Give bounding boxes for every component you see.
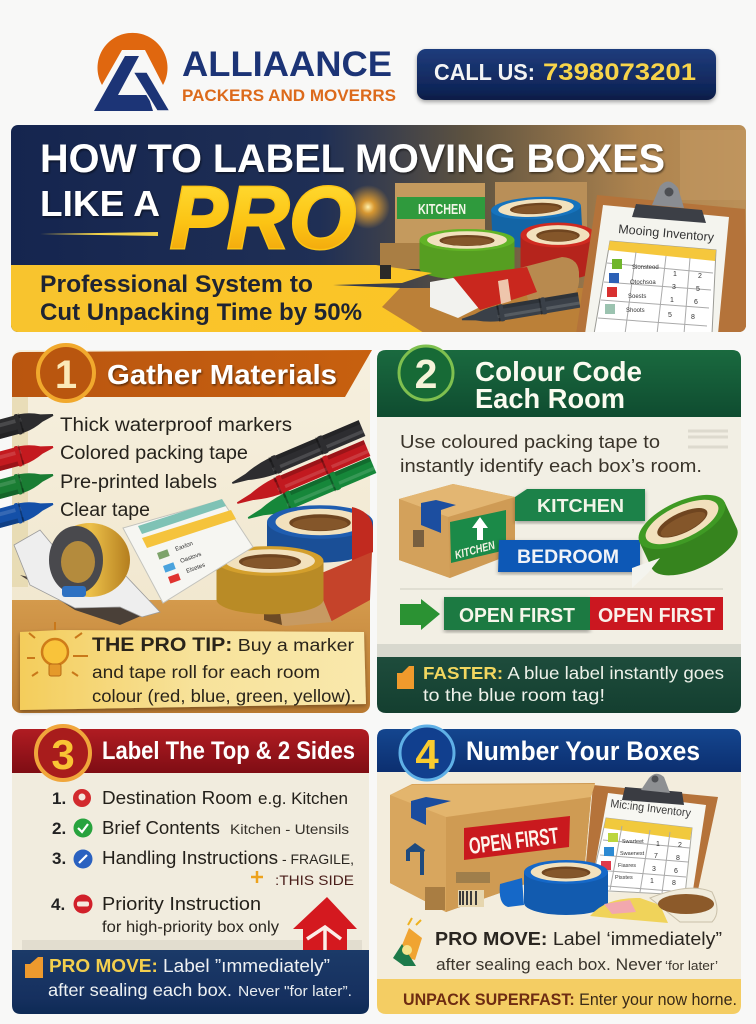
panel 2 background <box>377 350 741 713</box>
logo mark <box>94 33 170 111</box>
panel 4 heading: Number Your Boxes <box>466 736 700 766</box>
panel 1 header <box>12 350 372 397</box>
panel 2 body text: Use coloured packing tape to <box>400 432 660 452</box>
panel 2 heading: Each Room <box>475 383 625 414</box>
phone text: CALL US: <box>434 59 535 85</box>
inventory table: Sionsteod <box>632 265 659 271</box>
item 2 <box>52 818 349 838</box>
pro move text: PRO MOVE: Label ‘immediately” <box>435 929 722 949</box>
yellow ribbon <box>11 265 432 333</box>
icon: red house arrow <box>293 897 357 951</box>
hero banner <box>11 125 750 334</box>
pale band above footer <box>22 940 362 952</box>
icon: rocket bell <box>393 918 422 966</box>
inventory table: 1 <box>670 297 674 304</box>
item 1 <box>52 788 348 808</box>
open first row: OPEN FIRST <box>459 605 575 627</box>
bedroom tag: BEDROOM <box>517 547 619 568</box>
inventory table: 8 <box>672 880 676 887</box>
inventory table: Otochsoa <box>630 280 656 286</box>
company name: ALLIAANCE <box>182 45 392 84</box>
inventory table: 8 <box>691 314 695 321</box>
item 2: Kitchen - Utensils <box>230 821 349 837</box>
panel 1 background <box>12 350 370 713</box>
divider <box>400 588 723 590</box>
panel 2 body text <box>400 432 702 476</box>
inventory table: 6 <box>674 868 678 875</box>
panel 2: colour code <box>377 346 745 713</box>
green tape roll <box>420 229 514 280</box>
inventory table: Pisstes <box>615 875 633 881</box>
materials list: Clear tape <box>60 500 150 521</box>
panel 4: number your boxes: ‘for later’ <box>665 959 718 973</box>
label sheet: Elsetes <box>186 563 206 575</box>
pro tip card: colour (red, blue, green, yellow). <box>92 686 356 706</box>
red and cardboard wrap <box>262 552 372 626</box>
blue tape roll <box>490 195 583 250</box>
number badge 2: 2 <box>415 351 437 397</box>
inventory table: 2 <box>678 842 682 849</box>
unpack superfast bar <box>377 979 741 1014</box>
inventory table <box>594 241 716 334</box>
red open first tag <box>590 597 723 630</box>
label sheet <box>123 499 253 603</box>
inventory table: 1 <box>650 878 654 885</box>
inventory table: 1 <box>673 271 677 278</box>
item 4: for high-priority box only <box>102 919 279 936</box>
title line 2: LIKE A <box>40 183 160 224</box>
label sheet: Eaxlon <box>175 541 194 553</box>
sticky tape and pink label <box>590 888 717 923</box>
inventory table: 3 <box>672 284 676 291</box>
number badge 3: 3 <box>51 731 75 778</box>
item 1: e.g. Kitchen <box>258 790 348 808</box>
item 3 <box>52 848 354 888</box>
panel 1: gather materials <box>0 345 377 713</box>
panel 2 heading <box>475 356 642 414</box>
kitchen tag: KITCHEN <box>537 496 624 516</box>
materials list: Thick waterproof markers <box>60 415 292 436</box>
pro tip card: and tape roll for each room <box>92 662 320 682</box>
red tape roll <box>520 223 596 280</box>
open first label <box>464 816 570 860</box>
open first row: OPEN FIRST <box>598 605 715 627</box>
marker <box>462 292 580 322</box>
footer text: FASTER: A blue label instantly goes <box>423 663 724 683</box>
faint paper lines <box>688 431 728 447</box>
cardboard box <box>390 783 595 912</box>
inventory table: 6 <box>694 299 698 306</box>
number badge 2 <box>399 346 453 400</box>
panel 4 background <box>377 729 741 1014</box>
clipboard <box>576 181 748 334</box>
open first label: OPEN FIRST <box>467 822 560 859</box>
inventory table: 5 <box>668 312 672 319</box>
panel 3: label top and sides <box>12 726 369 1014</box>
item 3: Handling Instructions <box>102 848 278 868</box>
box house icon <box>406 843 425 875</box>
green tape roll <box>631 484 745 588</box>
bedroom tag <box>498 540 640 572</box>
panel 2 footer: to the blue room tag! <box>423 685 605 705</box>
panel 3 background <box>12 729 369 1014</box>
tube and red wrapped bundle <box>430 257 579 318</box>
inventory table: Swaenest <box>620 851 645 857</box>
materials list: Colored packing tape <box>60 443 248 464</box>
sparkle <box>351 186 389 228</box>
company tagline: PACKERS AND MOVERRS <box>182 86 396 105</box>
kitchen label: KITCHEN <box>418 201 466 218</box>
number badge 4 <box>400 726 454 780</box>
left markers <box>0 405 56 541</box>
kitchen label <box>397 197 485 219</box>
green open first tag <box>444 597 590 630</box>
inventory table: Swarteet <box>622 839 644 845</box>
icon: green arrow <box>400 599 440 630</box>
open first row <box>400 597 723 630</box>
kitchen tag <box>515 489 645 521</box>
underline accent <box>40 232 158 236</box>
number badge 1: 1 <box>55 353 77 397</box>
logo <box>94 33 396 111</box>
gold tape roll <box>216 546 324 614</box>
ribbon text: Professional System to <box>40 271 313 298</box>
panel 4 header <box>377 729 741 772</box>
call us pill <box>417 49 716 100</box>
blue tape tail <box>500 878 524 907</box>
panel 2 header <box>377 350 741 417</box>
inventory table: Soests <box>628 294 646 300</box>
item 4: Priority Instruction <box>102 894 261 914</box>
item 3: :THIS SIDE <box>275 872 354 888</box>
pro tip card <box>20 622 366 710</box>
panel 3 footer: Never "for later”. <box>238 984 352 1000</box>
barcode <box>425 872 490 910</box>
item 3: - FRAGILE, <box>282 851 354 867</box>
unpack superfast bar: UNPACK SUPERFAST: Enter your now horne. <box>403 990 737 1009</box>
item 2: Brief Contents <box>102 818 220 838</box>
item 4: 4. <box>51 895 65 914</box>
kitchen box <box>399 484 515 578</box>
number badge 1 <box>38 345 94 401</box>
item 2: 2. <box>52 819 66 838</box>
blue tape roll <box>524 860 608 915</box>
icon: light bulb <box>27 622 88 676</box>
panel 1 heading: Gather Materials <box>107 359 337 390</box>
tip text: THE PRO TIP: Buy a marker <box>92 635 354 656</box>
panel 3 header <box>12 729 369 773</box>
inventory table: Fiasres <box>618 863 636 869</box>
title line 1: HOW TO LABEL MOVING BOXES <box>40 137 665 181</box>
inventory table: 7 <box>654 853 658 860</box>
item 1: Destination Room <box>102 788 252 808</box>
clipboard <box>584 774 718 895</box>
materials list: Pre-printed labels <box>60 472 217 493</box>
kitchen box: KITCHEN <box>454 540 497 562</box>
clear tape and paper stack <box>14 523 160 625</box>
item 3: 3. <box>52 849 66 868</box>
item 1: 1. <box>52 789 66 808</box>
inventory table: 5 <box>696 286 700 293</box>
number badge 4: 4 <box>415 731 439 778</box>
item 4 <box>51 894 279 936</box>
inventory table: Shoots <box>626 308 645 314</box>
inventory table: 3 <box>652 866 656 873</box>
panel 2 heading: Colour Code <box>475 356 642 387</box>
right markers <box>229 419 377 527</box>
footer text: PRO MOVE: Label ”ımmediately” <box>49 956 330 976</box>
title PRO: PRO <box>170 168 356 267</box>
number badge 3 <box>36 726 90 780</box>
icon: thumbs up <box>25 957 43 978</box>
inventory table: 2 <box>698 273 702 280</box>
label sheet: Oastovs <box>180 552 202 565</box>
panel 3 footer: after sealing each box. <box>48 980 232 1000</box>
clipboard heading: Mic:ing Inventory <box>610 798 692 820</box>
panel 4: number your boxes: after sealing each box. Never <box>436 955 662 974</box>
wood table <box>380 288 750 334</box>
blue red tape roll <box>267 505 373 566</box>
icon: thumbs up <box>397 666 414 689</box>
panel 4: number your boxes <box>377 726 741 1014</box>
inventory table: 8 <box>676 855 680 862</box>
panel 3 footer <box>12 950 369 1014</box>
clipboard heading: Mooing Inventory <box>618 222 715 244</box>
panel 3 heading: Label The Top & 2 Sides <box>102 737 355 765</box>
materials list <box>60 415 292 521</box>
inventory table <box>590 818 692 895</box>
background boxes <box>380 130 750 269</box>
faint band above footer <box>377 644 741 658</box>
clipboard clip <box>622 774 684 805</box>
panel 2 footer <box>377 657 741 713</box>
call us pill: 7398073201 <box>543 59 696 86</box>
inventory table: 1 <box>656 841 660 848</box>
clipboard clip <box>632 181 706 223</box>
panel 2 body text: instantly identify each box’s room. <box>400 456 702 476</box>
yellow ribbon: Cut Unpacking Time by 50% <box>40 299 362 326</box>
